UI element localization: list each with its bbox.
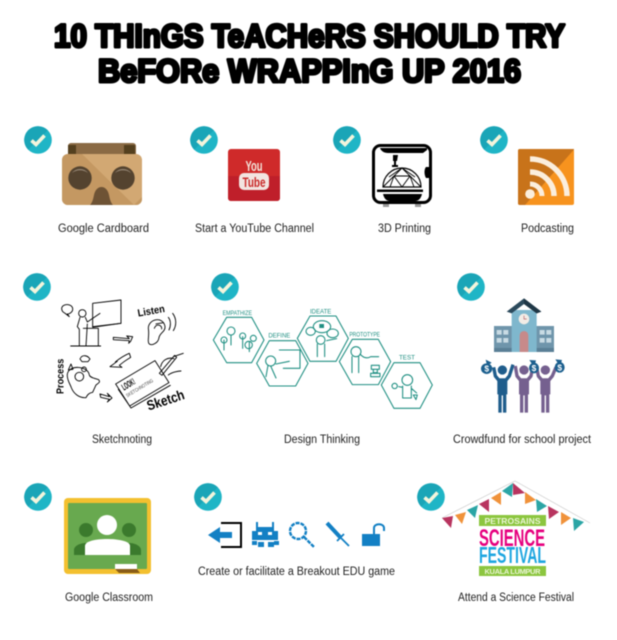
label: Breakout EDU: Create or facilitate a Breakout EDU game [198, 566, 395, 578]
icon: Google Classroom [64, 498, 151, 574]
title: 10 THInGS TeACHeRS SHOULD TRY [54, 18, 565, 54]
three people raising money bags: $ [484, 364, 489, 374]
label: Design Thinking: Design Thinking [284, 434, 360, 446]
hexagon: ideate: IDEATE [310, 308, 332, 315]
title [54, 18, 565, 89]
school building [494, 298, 554, 352]
label: Podcasting: Podcasting [521, 223, 574, 235]
three people raising money bags [481, 359, 565, 413]
hexagon: empathize: EMPATHIZE [223, 310, 252, 317]
icon: sketchnoting illustration: Process [55, 358, 66, 394]
check badge: Sketchnoting [23, 273, 51, 301]
title: BeFORe WRAPPInG UP 2016 [98, 53, 521, 89]
hexagon: test: TEST [399, 355, 415, 362]
check badge: Breakout EDU [194, 483, 222, 511]
icon: sketchnoting illustration [55, 300, 186, 414]
check badge: Google Cardboard [24, 126, 52, 154]
icons: Breakout EDU row [208, 522, 384, 547]
check badge: Crowdfund [457, 273, 485, 301]
hexagon: empathize [213, 310, 264, 363]
icon: YouTube: You [246, 158, 262, 175]
icon: Google Cardboard [62, 143, 142, 205]
icon: YouTube: Tube [242, 174, 266, 190]
SCIENCE: SCIENCE [479, 525, 545, 552]
check badge: 3D Printing [333, 126, 361, 154]
check badge: Google Classroom [24, 483, 52, 511]
check badge: Podcasting [480, 126, 508, 154]
top banner: PETROSAINS [484, 516, 541, 526]
label: Crowdfund: Crowdfund for school project [453, 434, 592, 446]
icon: RSS podcast [518, 149, 574, 205]
check badge: Design Thinking [211, 273, 239, 301]
icon: sketchnoting illustration: LOOK! [120, 377, 137, 392]
icon: sword [327, 523, 349, 546]
icon: open lock [362, 524, 384, 546]
hexagon: define [257, 333, 308, 386]
icon: space invader [252, 522, 279, 547]
hexagon: test [381, 355, 432, 408]
three people raising money bags: $ [532, 363, 537, 373]
icon: sketchnoting illustration: SKETCHNOTING [125, 378, 155, 399]
label: Science Festival: Attend a Science Festival [458, 592, 574, 604]
icon: 3D printer [374, 146, 430, 207]
label: YouTube: Start a YouTube Channel [195, 223, 314, 235]
three people raising money bags: $ [557, 362, 562, 372]
diagram: design thinking hexagons [213, 308, 432, 408]
icon: crowdfunding school [481, 298, 565, 413]
icon: sketchnoting illustration: Listen [137, 304, 166, 320]
check badge: Science Festival [417, 483, 445, 511]
icon: YouTube [228, 149, 280, 201]
label: Sketchnoting: Sketchnoting [92, 434, 152, 446]
check badge: YouTube [190, 126, 218, 154]
hexagon: prototype: PROTOTYPE [349, 332, 380, 339]
label: Google Classroom: Google Classroom [65, 592, 153, 604]
label: Google Cardboard: Google Cardboard [58, 223, 149, 235]
icon: sketchnoting illustration: Sketch [145, 386, 186, 414]
FESTIVAL: FESTIVAL [479, 542, 546, 568]
icon: exit arrow [208, 523, 241, 547]
label: 3D Printing: 3D Printing [378, 223, 431, 235]
hexagon: prototype [339, 332, 391, 385]
hexagon: define: DEFINE [268, 333, 291, 340]
bottom banner: KUALA LUMPUR [484, 567, 541, 576]
logo: Petrosains Science Festival [442, 481, 590, 576]
hexagon: ideate [297, 308, 348, 361]
icon: magnifying glass [290, 523, 314, 547]
bunting flags [442, 481, 590, 531]
